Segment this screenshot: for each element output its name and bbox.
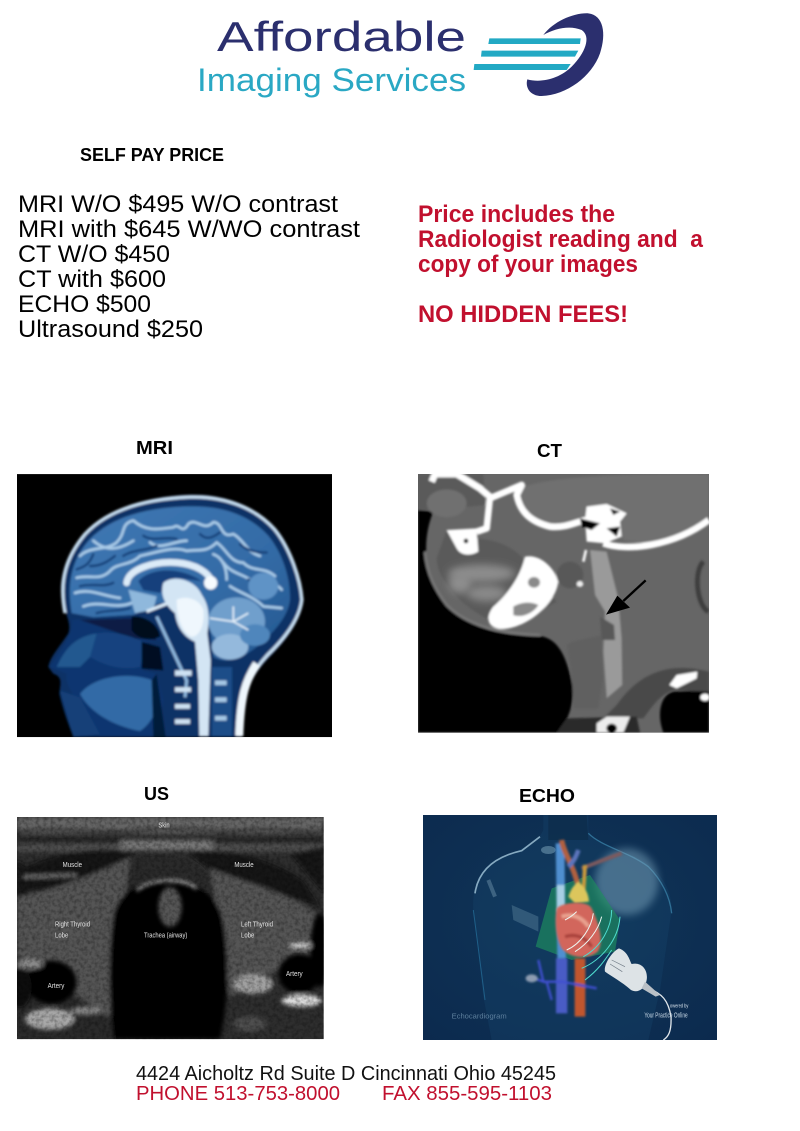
heart	[556, 903, 601, 957]
logo wordmark: Imaging Services: Imaging Services	[197, 62, 466, 98]
heading: self pay price: SELF PAY PRICE	[80, 145, 224, 165]
ultrasound annotation: artery right: Artery	[286, 969, 303, 978]
ultrasound probe	[605, 948, 671, 1040]
label: CT: CT	[537, 441, 562, 461]
fax: FAX 855-595-1103	[382, 1083, 552, 1105]
label: US: US	[144, 784, 169, 804]
image: CT scan with arrow	[418, 474, 710, 733]
icon: black arrow	[606, 580, 646, 615]
label: MRI: MRI	[136, 438, 173, 458]
image: MRI brain scan	[17, 474, 332, 737]
address: 4424 Aicholtz Rd Suite D Cincinnati Ohio 45245	[136, 1063, 556, 1085]
price list: CT W/O $450	[18, 241, 170, 268]
image: ultrasound of thyroid	[8, 817, 329, 1039]
ultrasound annotation: trachea: Trachea (airway)	[144, 931, 187, 940]
callout: price includes, no hidden fees: Price includes the	[418, 201, 615, 228]
image: echocardiogram illustration	[423, 815, 717, 1040]
great vessels	[526, 840, 622, 1017]
caption: Your Practice Online: Your Practice Online	[644, 1010, 688, 1019]
logo icon: swoosh and speed bars	[474, 13, 603, 96]
price list: ECHO $500	[18, 291, 151, 318]
ultrasound annotation: muscle left: Muscle	[63, 860, 82, 869]
price list: CT with $600	[18, 266, 166, 293]
footer: address and contact	[136, 1063, 556, 1105]
price list: MRI with $645 W/WO contrast	[18, 216, 360, 243]
caption: powered by: owered by	[670, 1003, 689, 1009]
ultrasound annotation: right lobe: Lobe	[55, 930, 68, 939]
phone: PHONE 513-753-8000	[136, 1083, 340, 1105]
callout: price includes, no hidden fees: copy of your images	[418, 251, 638, 278]
logo: Affordable Imaging Services	[197, 13, 603, 98]
label: ECHO: ECHO	[519, 786, 575, 806]
ultrasound waves	[565, 912, 602, 952]
price list: Ultrasound $250	[18, 316, 203, 343]
caption: Echocardiogram: Echocardiogram	[452, 1011, 507, 1020]
ultrasound annotation: artery left: Artery	[48, 981, 65, 990]
callout: price includes, no hidden fees	[418, 201, 704, 328]
price list	[18, 191, 360, 343]
price list: MRI W/O $495 W/O contrast	[18, 191, 338, 218]
ultrasound annotation: skin: Skin	[158, 820, 170, 829]
ultrasound annotation: left lobe: Lobe	[241, 930, 254, 939]
logo wordmark: Affordable: Affordable	[217, 13, 466, 60]
callout: price includes, no hidden fees: NO HIDDEN FEES!	[418, 301, 628, 328]
ultrasound beam sector	[536, 875, 620, 960]
ultrasound annotation: muscle right: Muscle	[234, 860, 254, 869]
ultrasound annotation: left thyroid lobe: Left Thyroid	[241, 919, 273, 928]
body silhouette	[473, 815, 672, 1040]
callout: price includes, no hidden fees: Radiologist reading and a	[418, 226, 704, 253]
ultrasound annotation: right thyroid lobe: Right Thyroid	[55, 919, 90, 928]
